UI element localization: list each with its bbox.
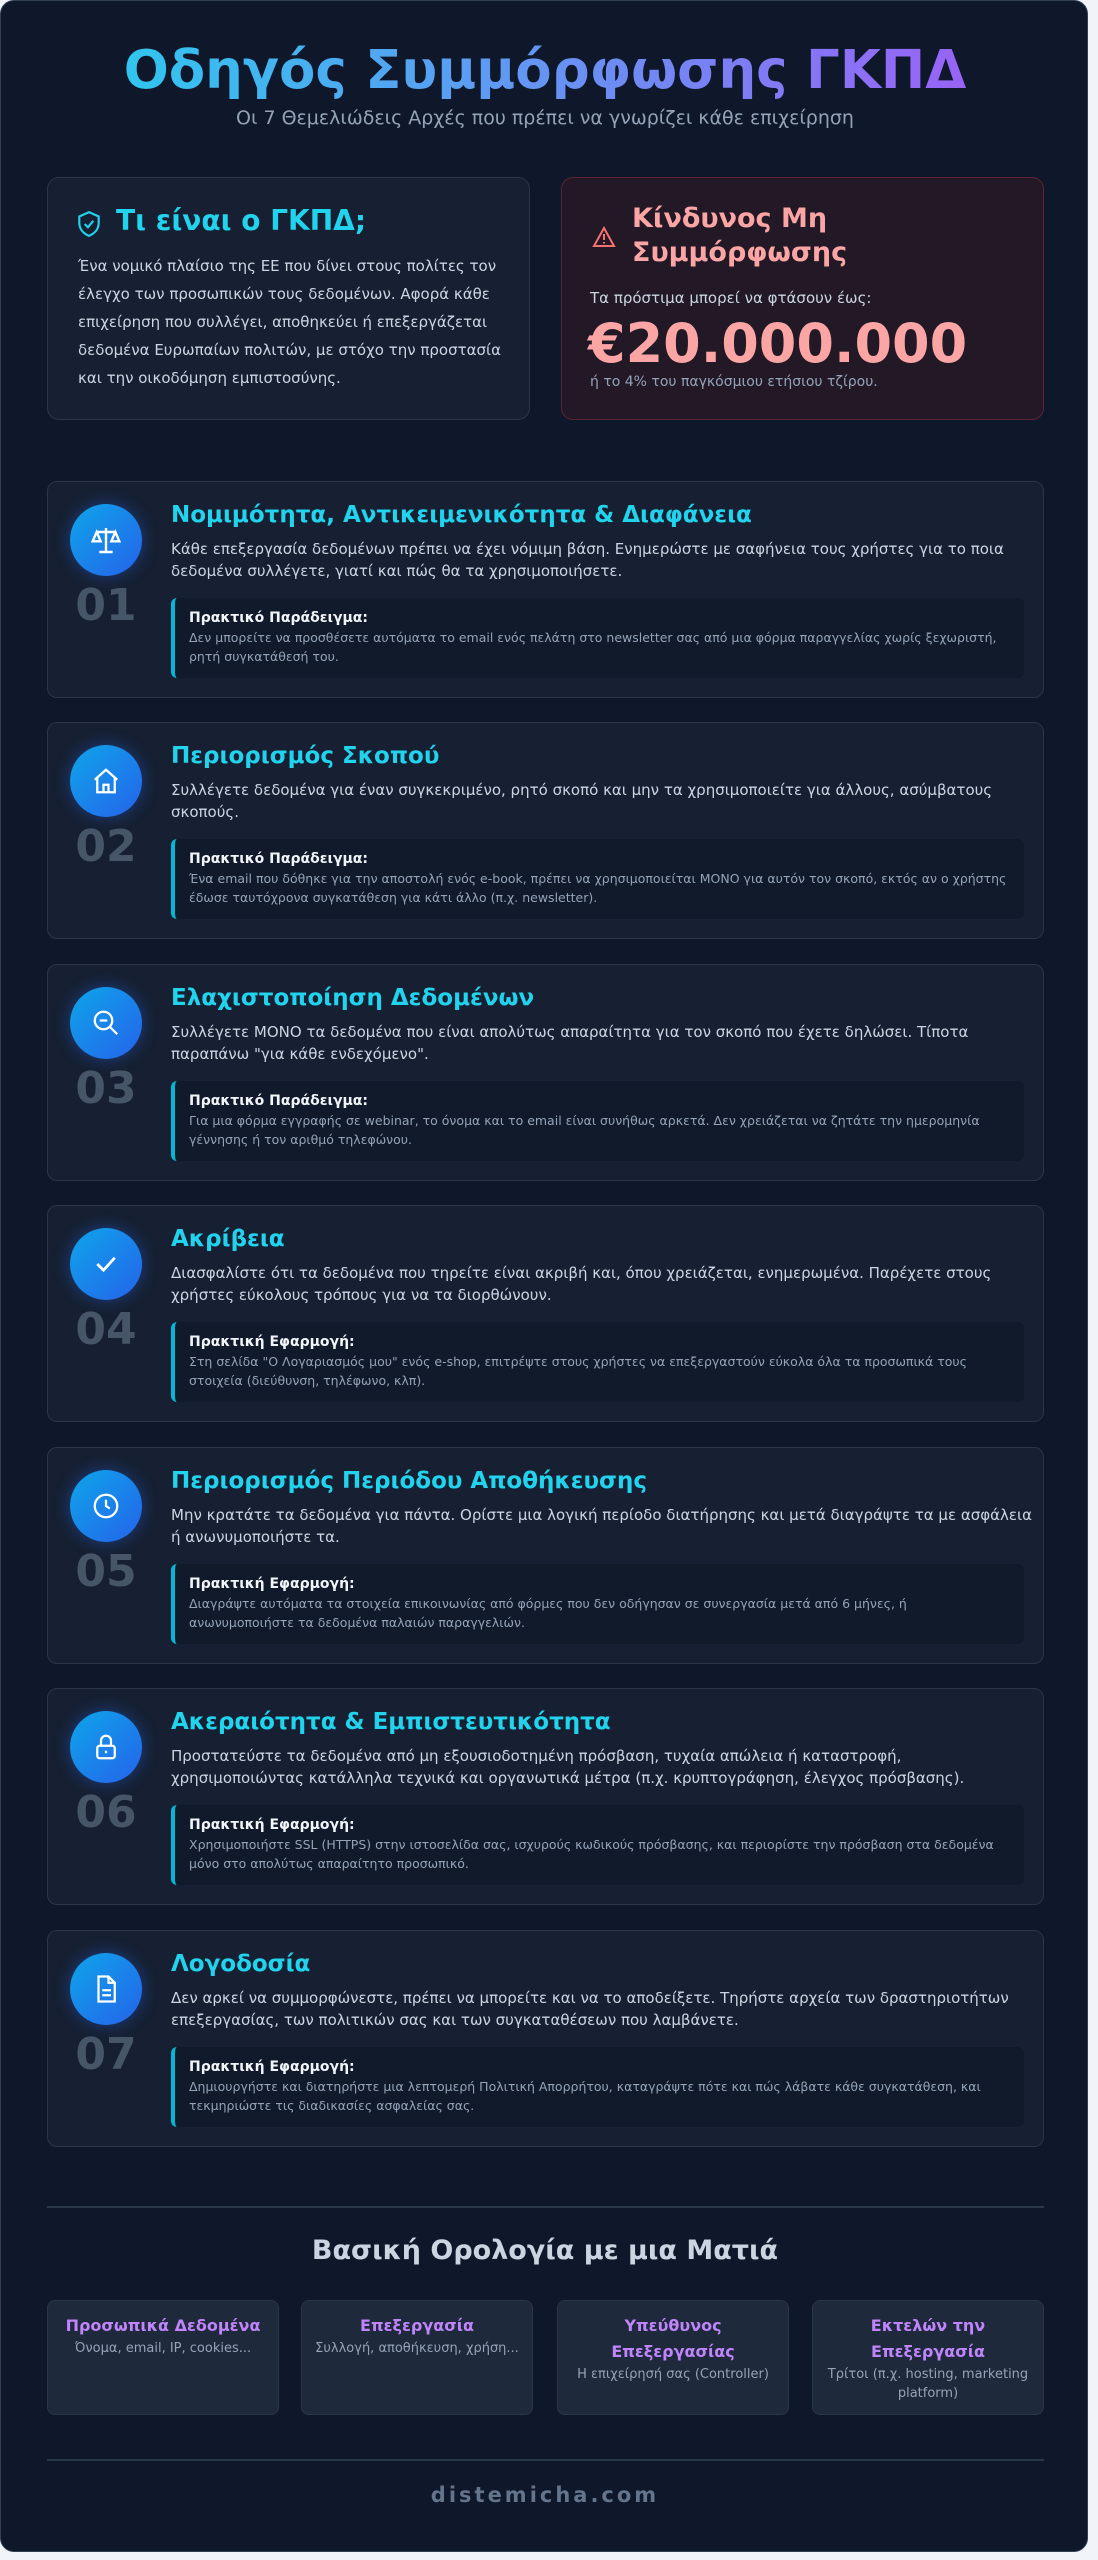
number: 05: [75, 1546, 137, 1597]
title: Νομιμότητα, Αντικειμενικότητα & Διαφάνεια: [171, 502, 752, 528]
description: Διασφαλίστε ότι τα δεδομένα που τηρείτε είναι ακριβή και, όπου χρειάζεται, ενημερωμένα. Παρέχετε στους χρήστες εύκολους τρόπους για να τα διορθώνουν.: [171, 1264, 991, 1304]
term: processing: Συλλογή, αποθήκευση, χρήση...: [315, 2341, 519, 2356]
example: Πρακτικό Παράδειγμα:: [189, 851, 368, 867]
example: Στη σελίδα "Ο Λογαριασμός μου" ενός e-shop, επιτρέψτε στους χρήστες να επεξεργαστούν εύκολα όλα τα προσωπικά τους στοιχεία (διεύθυνση, τηλέφωνο, κλπ).: [189, 1354, 967, 1388]
term: processing: Επεξεργασία: [360, 2316, 474, 2335]
term: processor: Εκτελών την Επεξεργασία: [871, 2316, 985, 2361]
title: Περιορισμός Περιόδου Αποθήκευσης: [171, 1468, 647, 1494]
number: 03: [75, 1063, 137, 1114]
example: Δημιουργήστε και διατηρήστε μια λεπτομερή Πολιτική Απορρήτου, καταγράψτε πότε και πώς λάβατε κάθε συγκατάθεση, και τεκμηριώστε τις διαδικασίες ασφαλείας σας.: [189, 2079, 981, 2113]
card 07: [47, 1930, 1044, 2147]
note: ή το 4% του παγκόσμιου ετήσιου τζίρου.: [590, 374, 878, 390]
term: processor: Τρίτοι (π.χ. hosting, marketing platform): [828, 2367, 1028, 2401]
title: Ακεραιότητα & Εμπιστευτικότητα: [171, 1709, 611, 1735]
icon: magnifier: [70, 987, 142, 1059]
example: Πρακτικό Παράδειγμα:: [189, 1093, 368, 1109]
description: Συλλέγετε δεδομένα για έναν συγκεκριμένο, ρητό σκοπό και μην τα χρησιμοποιείτε για άλλους, ασύμβατους σκοπούς.: [171, 781, 992, 821]
description: Κάθε επεξεργασία δεδομένων πρέπει να έχει νόμιμη βάση. Ενημερώστε με σαφήνεια τους χρήστες για το ποια δεδομένα συλλέγετε, γιατί και πώς θα τα χρησιμοποιήσετε.: [171, 540, 1004, 580]
title: Ελαχιστοποίηση Δεδομένων: [171, 985, 534, 1011]
card 06: [47, 1688, 1044, 1905]
heading: Τι είναι ο ΓΚΠΔ;: [116, 204, 366, 237]
title: Οδηγός Συμμόρφωσης ΓΚΠΔ: [124, 40, 966, 101]
footer: distemicha.com: [431, 2483, 659, 2507]
text: Τα πρόστιμα μπορεί να φτάσουν έως:: [590, 289, 871, 307]
icon: warning: [592, 226, 616, 247]
example: Δεν μπορείτε να προσθέσετε αυτόματα το email ενός πελάτη στο newsletter σας από μια φόρμα παραγγελίας χωρίς ξεχωριστή, ρητή συγκατάθεσή του.: [189, 630, 997, 664]
example: Διαγράψτε αυτόματα τα στοιχεία επικοινωνίας από φόρμες που δεν οδήγησαν σε συνεργασία μετά από 6 μήνες, ή ανωνυμοποιήστε τα δεδομένα παλαιών παραγγελιών.: [189, 1596, 907, 1630]
card 02: [47, 722, 1044, 939]
term: controller: Υπεύθυνος Επεξεργασίας: [611, 2316, 735, 2361]
title: Περιορισμός Σκοπού: [171, 743, 439, 769]
example: Πρακτική Εφαρμογή:: [189, 1817, 355, 1833]
card 03: [47, 964, 1044, 1181]
term: controller: [557, 2300, 789, 2415]
icon: lock: [70, 1711, 142, 1783]
number: 04: [75, 1304, 137, 1355]
example: [171, 1081, 1024, 1161]
icon: house: [70, 745, 142, 817]
example: Πρακτική Εφαρμογή:: [189, 2059, 355, 2075]
example: [171, 598, 1024, 678]
icon: document: [70, 1953, 142, 2025]
example: Ένα email που δόθηκε για την αποστολή ενός e-book, πρέπει να χρησιμοποιείται ΜΟΝΟ για αυτόν τον σκοπό, εκτός αν ο χρήστης έδωσε ταυτόχρονα συγκατάθεση για κάτι άλλο (π.χ. newsletter).: [189, 871, 1006, 905]
icon: check: [70, 1228, 142, 1300]
text: Ένα νομικό πλαίσιο της ΕΕ που δίνει στους πολίτες τον έλεγχο των προσωπικών τους δεδομένων. Αφορά κάθε επιχείρηση που συλλέγει, αποθηκεύει ή επεξεργάζεται δεδομένα Ευρωπαίων πολιτών, με στόχο την προστασία και την οικοδόμηση εμπιστοσύνης.: [78, 257, 501, 387]
heading: Συμμόρφωσης: [632, 237, 847, 268]
terminology heading: Βασική Ορολογία με μια Ματιά: [312, 2235, 778, 2266]
subtitle: Οι 7 Θεμελιώδεις Αρχές που πρέπει να γνωρίζει κάθε επιχείρηση: [236, 107, 854, 129]
example: [171, 1564, 1024, 1644]
title: Ακρίβεια: [171, 1226, 285, 1252]
example: Για μια φόρμα εγγραφής σε webinar, το όνομα και το email είναι συνήθως αρκετά. Δεν χρειάζεται να ζητάτε την ημερομηνία γέννησης ή τον αριθμό τηλεφώνου.: [189, 1113, 980, 1147]
example: Πρακτικό Παράδειγμα:: [189, 610, 368, 626]
panel: risk: [561, 177, 1044, 420]
card 05: [47, 1447, 1044, 1664]
card 04: [47, 1205, 1044, 1422]
example: [171, 1805, 1024, 1885]
icon: shield: [78, 211, 100, 237]
example: [171, 839, 1024, 919]
heading: Κίνδυνος Μη: [632, 203, 827, 234]
example: [171, 2047, 1024, 2127]
fine amount: €20.000.000: [588, 312, 967, 375]
example: Χρησιμοποιήστε SSL (HTTPS) στην ιστοσελίδα σας, ισχυρούς κωδικούς πρόσβασης, και περιορίστε την πρόσβαση στα δεδομένα μόνο στο απολύτως απαραίτητο προσωπικό.: [189, 1837, 994, 1871]
term: controller: Η επιχείρησή σας (Controller): [577, 2367, 769, 2382]
number: 01: [75, 580, 137, 631]
description: Συλλέγετε ΜΟΝΟ τα δεδομένα που είναι απολύτως απαραίτητα για τον σκοπό που έχετε δηλώσει. Τίποτα παραπάνω "για κάθε ενδεχόμενο".: [171, 1023, 968, 1063]
term: personal data: Όνομα, email, IP, cookies...: [75, 2341, 251, 2356]
icon: clock: [70, 1470, 142, 1542]
description: Μην κρατάτε τα δεδομένα για πάντα. Ορίστε μια λογική περίοδο διατήρησης και μετά διαγράψτε τα με ασφάλεια ή ανωνυμοποιήστε τα.: [171, 1506, 1032, 1546]
description: Δεν αρκεί να συμμορφώνεστε, πρέπει να μπορείτε και να το αποδείξετε. Τηρήστε αρχεία των δραστηριοτήτων επεξεργασίας, των πολιτικών σας και των συγκαταθέσεων που λαμβάνετε.: [171, 1989, 1009, 2029]
example: Πρακτική Εφαρμογή:: [189, 1334, 355, 1350]
term: personal data: Προσωπικά Δεδομένα: [66, 2316, 260, 2335]
card 01: [47, 481, 1044, 698]
icon: scales: [70, 504, 142, 576]
example: [171, 1322, 1024, 1402]
number: 07: [75, 2029, 137, 2080]
heading: [632, 203, 847, 268]
term: processor: [812, 2300, 1044, 2415]
number: 02: [75, 821, 137, 872]
term: processing: [301, 2300, 533, 2415]
term: personal data: [47, 2300, 279, 2415]
description: Προστατεύστε τα δεδομένα από μη εξουσιοδοτημένη πρόσβαση, τυχαία απώλεια ή καταστροφή, χρησιμοποιώντας κατάλληλα τεχνικά και οργανωτικά μέτρα (π.χ. κρυπτογράφηση, έλεγχος πρόσβασης).: [171, 1747, 964, 1787]
number: 06: [75, 1787, 137, 1838]
example: Πρακτική Εφαρμογή:: [189, 1576, 355, 1592]
panel: what is GDPR: [47, 177, 530, 420]
title: Λογοδοσία: [171, 1951, 310, 1977]
